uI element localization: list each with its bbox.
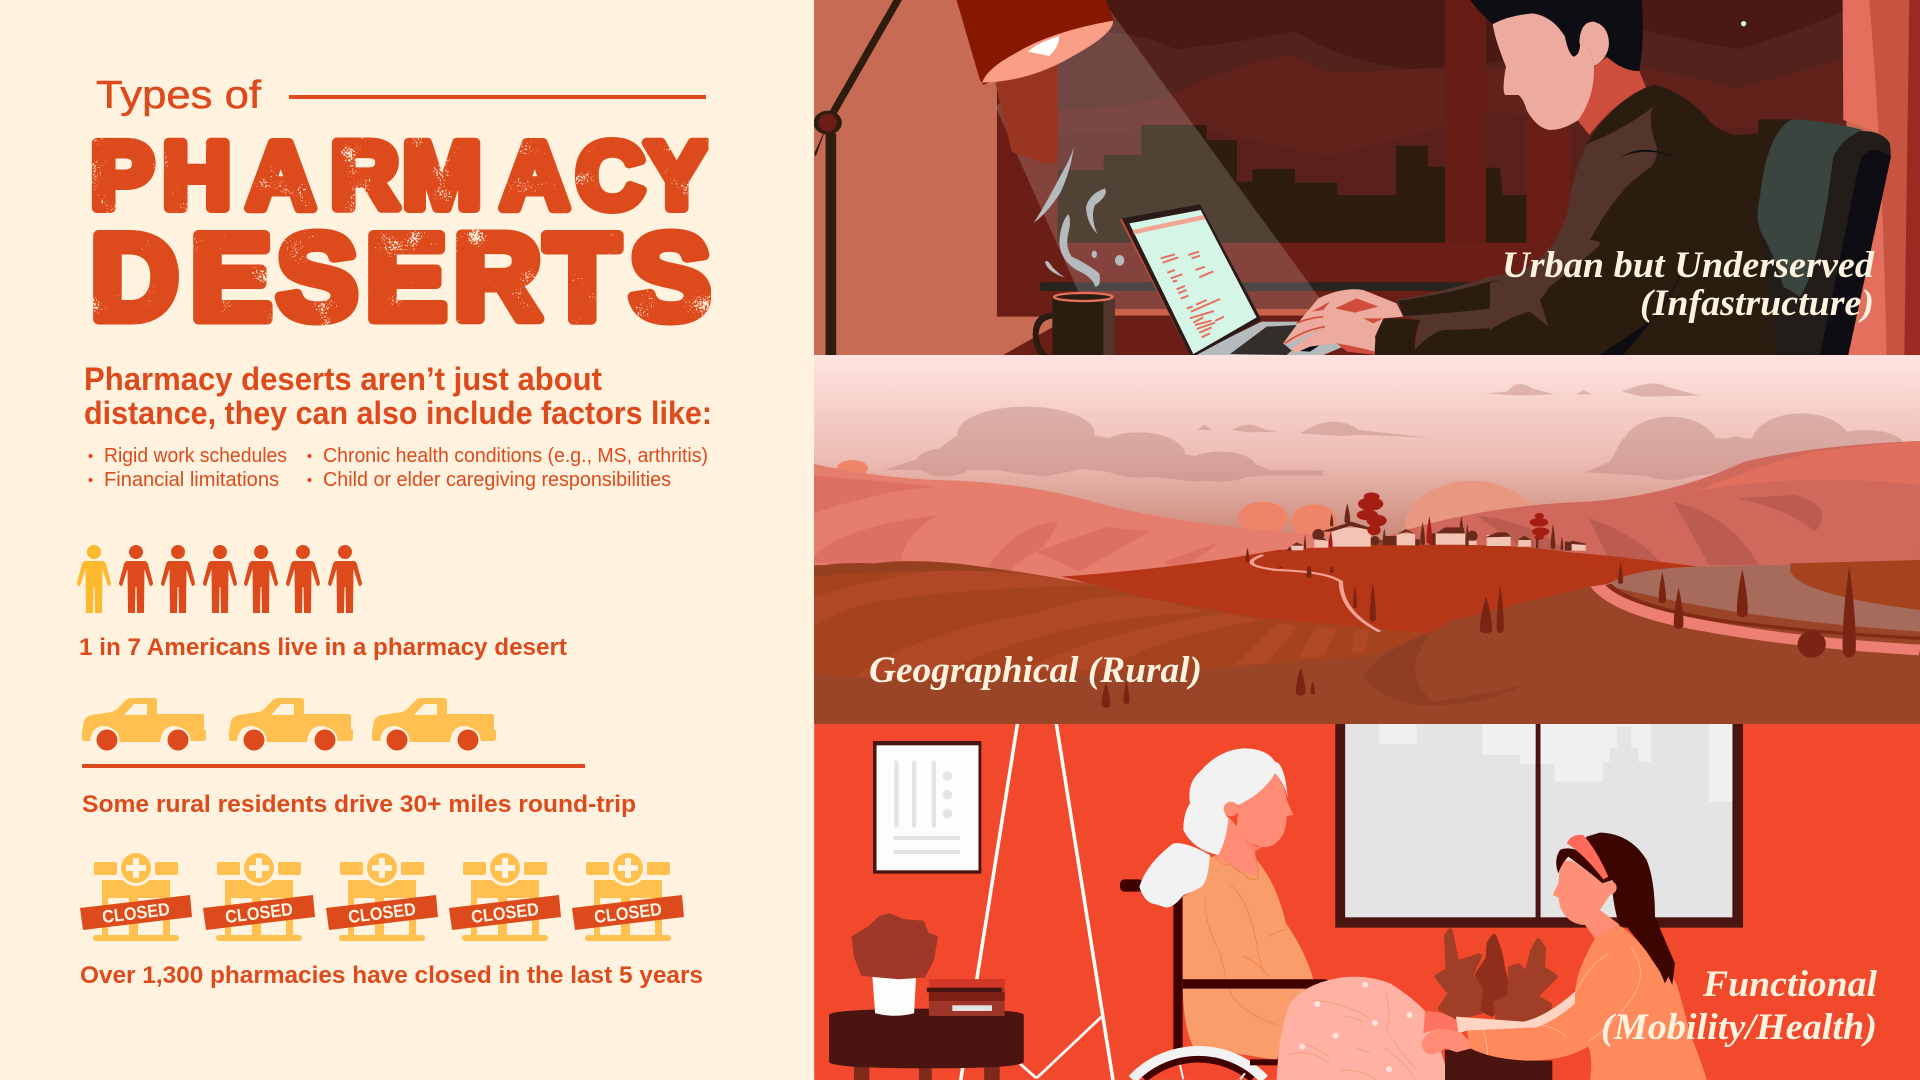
factor list: Chronic health conditions (e.g., MS, arthritis) bbox=[323, 445, 708, 467]
title: PHARMACY: PHARMACY bbox=[90, 123, 708, 229]
factor list bbox=[88, 445, 708, 491]
caption: Urban but Underserved: (Infastructure) bbox=[1640, 283, 1874, 324]
icons: seven people, one highlighted bbox=[77, 545, 362, 613]
caption: Urban but Underserved: Urban but Underserved bbox=[1502, 245, 1875, 286]
caption: Geographical (Rural): Geographical (Rural) bbox=[869, 650, 1202, 691]
caption: Functional (Mobility/Health): (Mobility/Health) bbox=[1601, 1007, 1877, 1048]
caption: Urban but Underserved bbox=[1502, 245, 1875, 324]
icons: five closed pharmacies: CLOSED bbox=[224, 899, 294, 927]
statistic: 1,300 closures: Over 1,300 pharmacies have closed in the last 5 years bbox=[80, 962, 703, 989]
caption: Functional (Mobility/Health): Functional bbox=[1702, 964, 1878, 1005]
icons: five closed pharmacies bbox=[80, 850, 684, 941]
intro line two: distance, they can also include factors like: bbox=[84, 395, 712, 431]
heading: Types of: Types of bbox=[96, 74, 261, 117]
factor list: Child or elder caregiving responsibilities bbox=[323, 469, 671, 491]
title: DESERTS: DESERTS bbox=[90, 209, 711, 345]
intro line one: Pharmacy deserts aren’t just about bbox=[84, 361, 602, 397]
caption: Functional (Mobility/Health) bbox=[1601, 964, 1878, 1048]
icons: three pickup trucks bbox=[82, 698, 496, 752]
statistic: 30+ miles: Some rural residents drive 30+ miles round-trip bbox=[82, 791, 636, 818]
factor list: Rigid work schedules bbox=[104, 445, 287, 467]
panel: functional illustration bbox=[814, 720, 1920, 1080]
road line bbox=[82, 764, 585, 768]
heading rule bbox=[289, 95, 706, 99]
icons: five closed pharmacies: CLOSED bbox=[347, 899, 417, 927]
panel: rural illustration bbox=[810, 355, 1920, 725]
panel: urban illustration bbox=[810, 0, 1920, 355]
statistic: 1 in 7: 1 in 7 Americans live in a pharmacy desert bbox=[79, 634, 567, 661]
icons: five closed pharmacies: CLOSED bbox=[470, 899, 540, 927]
left panel background bbox=[0, 0, 814, 1080]
factor list: Financial limitations bbox=[104, 469, 279, 491]
icons: five closed pharmacies: CLOSED bbox=[593, 899, 663, 927]
panel: title and introduction bbox=[84, 74, 712, 491]
icons: five closed pharmacies: CLOSED bbox=[101, 899, 171, 927]
